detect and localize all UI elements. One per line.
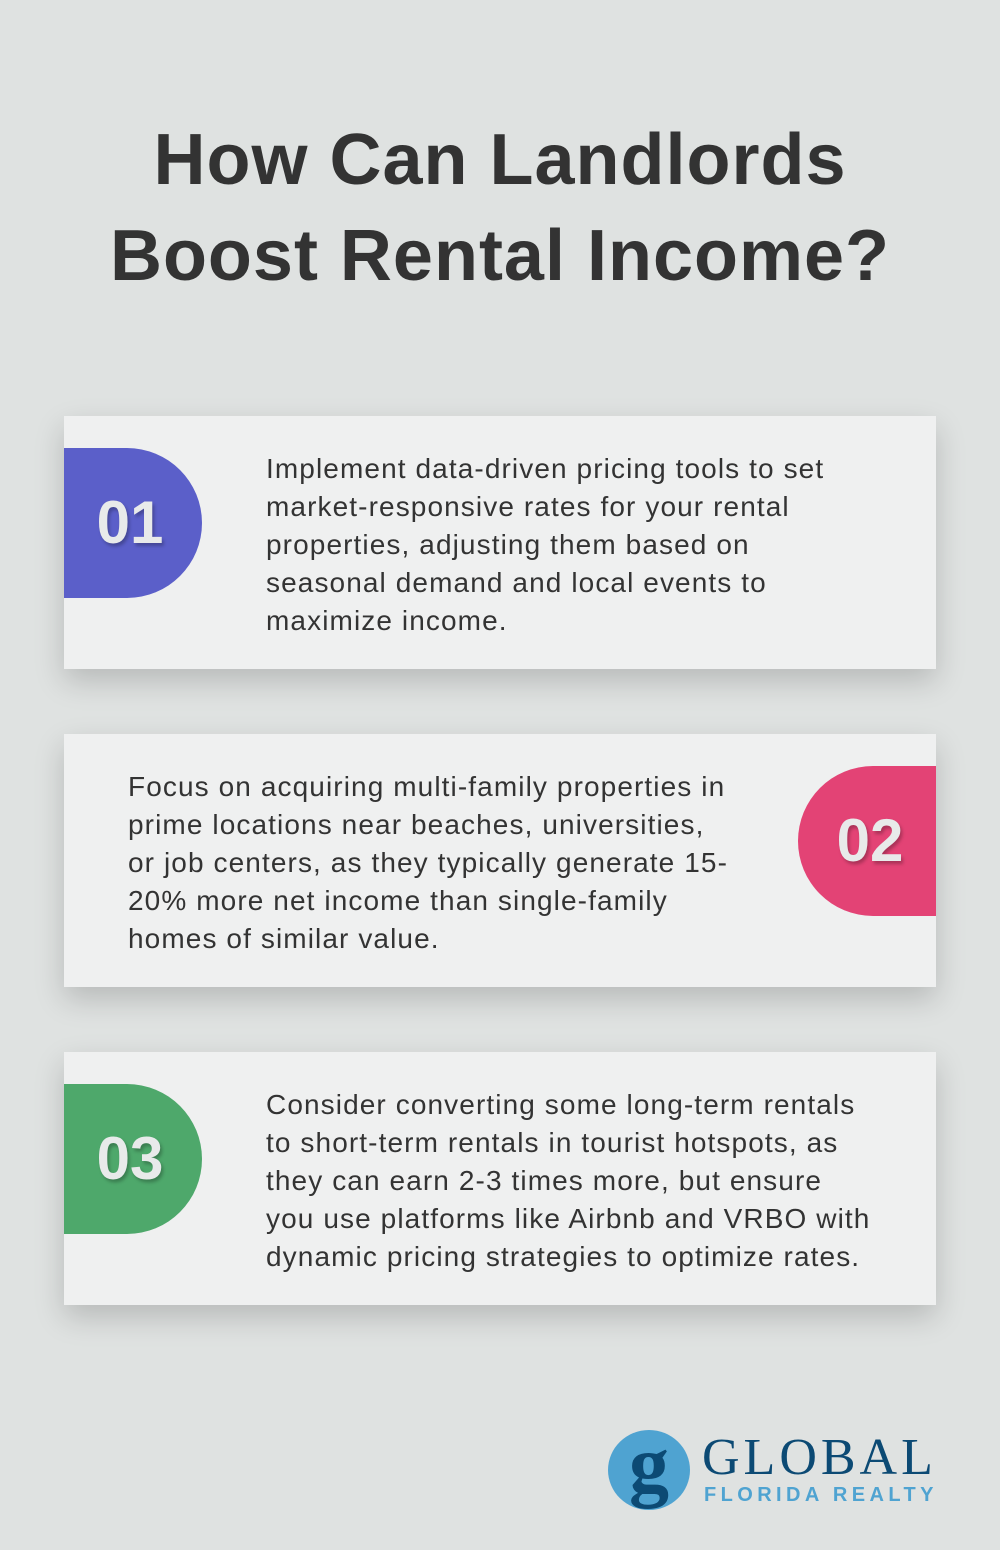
text 1: Implement data-driven pricing tools to set bbox=[266, 453, 824, 484]
text 2: or job centers, as they typically generate 15- bbox=[128, 847, 728, 878]
text 3: dynamic pricing strategies to optimize rates. bbox=[266, 1241, 860, 1272]
badge 03: 03 bbox=[97, 1125, 163, 1192]
text 3: they can earn 2-3 times more, but ensure bbox=[266, 1165, 822, 1196]
badge 02 bbox=[798, 766, 936, 916]
badge 02: 02 bbox=[837, 807, 903, 874]
title: Boost Rental Income? bbox=[110, 216, 890, 296]
text 3: you use platforms like Airbnb and VRBO with bbox=[266, 1203, 870, 1234]
logo icon bbox=[608, 1430, 690, 1510]
logo icon: g bbox=[629, 1421, 669, 1509]
text 2: prime locations near beaches, universities, bbox=[128, 809, 704, 840]
logo text: GLOBAL bbox=[702, 1429, 937, 1486]
text 3 bbox=[266, 1089, 870, 1272]
text 3: Consider converting some long-term rentals bbox=[266, 1089, 855, 1120]
text 2: 20% more net income than single-family bbox=[128, 885, 668, 916]
text 2: homes of similar value. bbox=[128, 923, 440, 954]
card 1 bbox=[64, 416, 936, 669]
card 2 bbox=[64, 734, 936, 987]
badge 01: 01 bbox=[97, 489, 163, 556]
text 3: to short-term rentals in tourist hotspots, as bbox=[266, 1127, 838, 1158]
text 2: Focus on acquiring multi-family properties in bbox=[128, 771, 725, 802]
title: How Can Landlords bbox=[153, 120, 847, 200]
text 2 bbox=[128, 771, 728, 954]
logo: FLORIDA REALTY bbox=[704, 1484, 938, 1506]
badge 03 bbox=[64, 1084, 202, 1234]
title bbox=[110, 120, 890, 296]
text 1 bbox=[266, 453, 824, 636]
card 3 bbox=[64, 1052, 936, 1305]
text 1: seasonal demand and local events to bbox=[266, 567, 767, 598]
text 1: maximize income. bbox=[266, 605, 508, 636]
logo bbox=[608, 1421, 938, 1510]
text 1: market-responsive rates for your rental bbox=[266, 491, 790, 522]
badge 01 bbox=[64, 448, 202, 598]
text 1: properties, adjusting them based on bbox=[266, 529, 750, 560]
